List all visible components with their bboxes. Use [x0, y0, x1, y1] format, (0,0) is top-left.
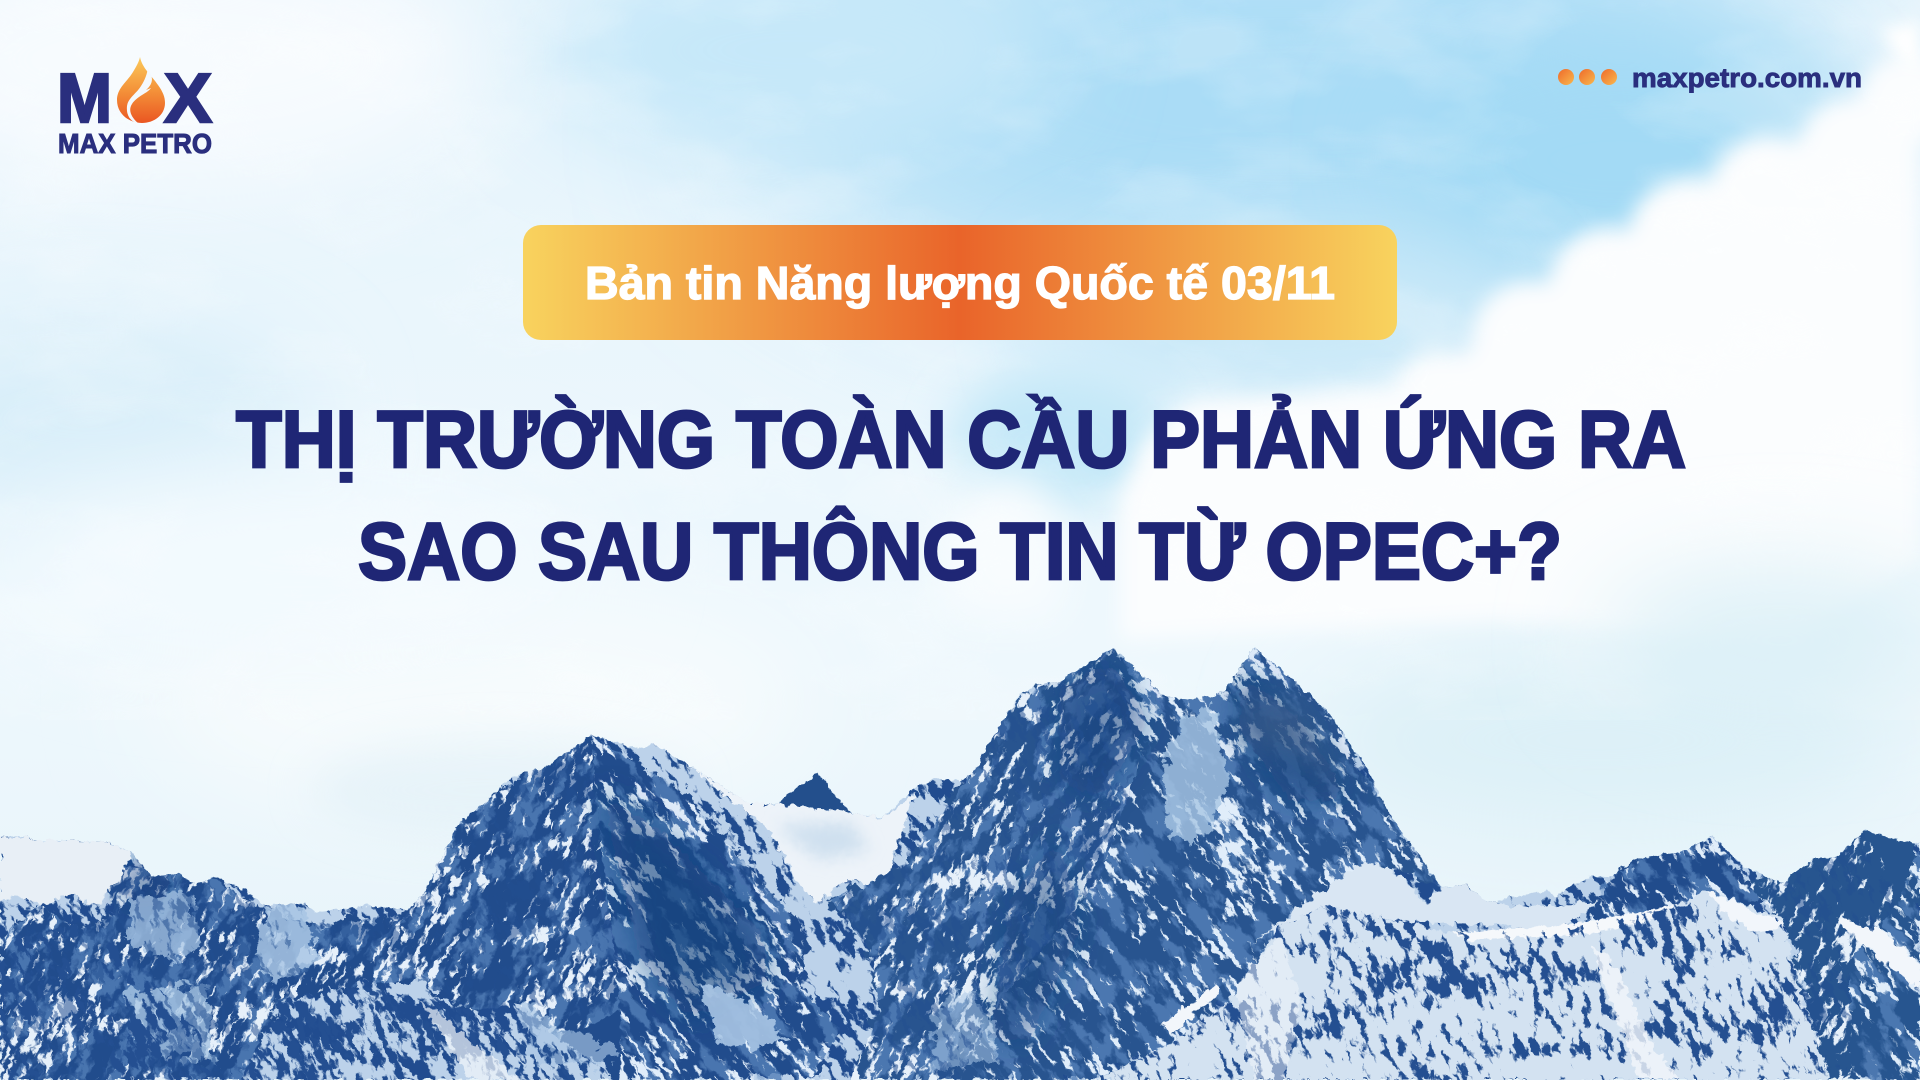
- rock speckle over couloirs: [0, 640, 1920, 1080]
- sunlit snow slopes: [420, 890, 1920, 1080]
- blue-shaded snow couloirs: [125, 705, 1228, 1070]
- website link with dots: [1558, 63, 1862, 93]
- dark rock masses: [0, 647, 1920, 1080]
- illustration: snow-covered mountain range: [0, 640, 1920, 1080]
- snow saddle on central massif: [1250, 863, 1600, 945]
- foreground snow ridge: [1090, 890, 1830, 1080]
- glacier shading: [775, 822, 870, 860]
- bright ridge crest: [1450, 905, 1676, 940]
- upper-left snowfield: [0, 837, 132, 905]
- icon: three orange dots: [1558, 69, 1617, 85]
- date banner: [523, 225, 1397, 340]
- logo letter M: M: [57, 59, 112, 137]
- logo: Max Petro: [57, 57, 212, 159]
- logo wordmark: MAX PETRO: [58, 128, 212, 159]
- mid-tone mottling on rock, left faces: [0, 640, 1920, 1080]
- banner background: [523, 225, 1397, 340]
- website address: maxpetro.com.vn: [1632, 63, 1862, 93]
- title: [236, 394, 1686, 597]
- title line 2: SAO SAU THÔNG TIN TỪ OPEC+?: [358, 506, 1562, 597]
- rock speckle over snow: [0, 640, 1920, 1080]
- small dark peak: [778, 773, 851, 813]
- title line 1: THỊ TRƯỜNG TOÀN CẦU PHẢN ỨNG RA: [236, 394, 1686, 485]
- logo letter X: X: [164, 59, 212, 137]
- mid-tone mottling on rock, right faces: [591, 648, 1920, 1080]
- logo flame icon: [117, 57, 165, 123]
- banner text: Bản tin Năng lượng Quốc tế 03/11: [585, 257, 1335, 309]
- stone face: [1240, 700, 1345, 790]
- deep shadow tones: [120, 660, 1350, 1040]
- glacier between the peaks: [686, 763, 915, 905]
- snow base of the range: [0, 640, 1920, 1080]
- rock speckle on foreground ridge: [0, 640, 1920, 1080]
